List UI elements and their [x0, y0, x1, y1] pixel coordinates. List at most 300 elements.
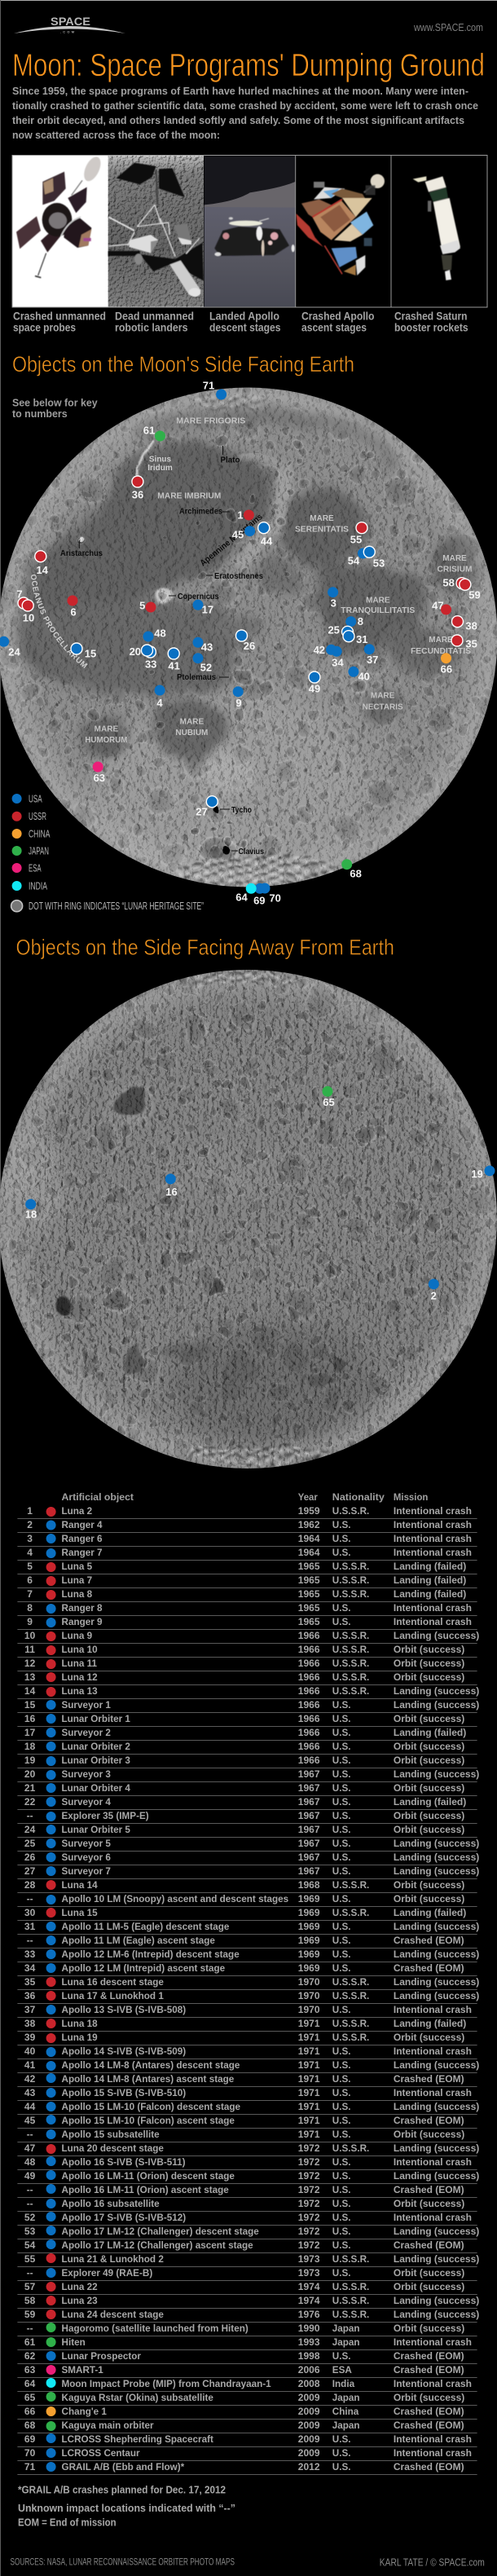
- row 13: Orbit (success): [394, 1671, 464, 1683]
- row 61: [17, 2336, 477, 2350]
- row 13: Luna 12: [62, 1672, 98, 1683]
- row 44: 1971: [298, 2101, 320, 2112]
- row 53: 1972: [298, 2226, 320, 2237]
- row 66: [17, 2406, 477, 2420]
- row 70: Intentional crash: [394, 2447, 472, 2459]
- row 28: 1968: [298, 1879, 320, 1891]
- row 36: U.S.S.R.: [332, 1991, 369, 2001]
- row 51: U.S.: [332, 2199, 351, 2209]
- intro text: now scattered across the face of the moon:: [12, 129, 220, 141]
- marker 65: [323, 1086, 335, 1108]
- row 57: 1974: [298, 2281, 320, 2292]
- marker 54: [348, 548, 368, 567]
- row 34: [17, 1962, 477, 1976]
- marker 19: 19: [471, 1168, 483, 1180]
- legend: USSR: [12, 811, 46, 822]
- row 15: U.S.: [332, 1700, 351, 1711]
- row 24: 1967: [298, 1824, 320, 1835]
- marker 20: [130, 645, 153, 658]
- row 54: 1972: [298, 2239, 320, 2251]
- row 52: Apollo 17 S-IVB (S-IVB-512): [62, 2213, 186, 2223]
- row 60: [17, 2323, 477, 2336]
- row 56: Orbit (success): [394, 2267, 464, 2279]
- row 50: Crashed (EOM): [394, 2184, 464, 2195]
- row 12: [17, 1658, 477, 1671]
- row 31: [17, 1921, 479, 1935]
- marker 49: 49: [309, 683, 320, 695]
- row 41: Apollo 14 LM-8 (Antares) descent stage: [62, 2060, 240, 2071]
- label: Plato: Plato: [220, 455, 240, 465]
- table header: [62, 1491, 428, 1503]
- row 50: U.S.: [332, 2185, 351, 2195]
- marker 43: [192, 637, 213, 654]
- row 68: Japan: [332, 2420, 360, 2431]
- row 65: 2009: [298, 2392, 320, 2403]
- row 65: 65: [24, 2392, 36, 2403]
- row 24: Orbit (success): [394, 1824, 464, 1835]
- row 26: Surveyor 6: [62, 1852, 111, 1863]
- row 43: Intentional crash: [394, 2087, 472, 2098]
- row 60: --: [27, 2323, 33, 2334]
- row 48: Intentional crash: [394, 2156, 472, 2168]
- row 25: 1967: [298, 1838, 320, 1849]
- marker 71: [203, 379, 227, 399]
- marker 6: 6: [70, 606, 77, 618]
- row 64: [17, 2378, 477, 2392]
- logo: SPACE.com: SPACE: [51, 15, 90, 28]
- note: see below for key: to numbers: [12, 407, 68, 420]
- label: Mare Humorum: HUMORUM: [85, 736, 127, 745]
- website url: www.SPACE.com: [413, 22, 483, 33]
- row 1: [17, 1505, 477, 1519]
- row 7: 7: [27, 1588, 33, 1600]
- row 56: --: [27, 2267, 33, 2279]
- label: Sinus Iridum: [147, 455, 173, 473]
- row 46: Orbit (success): [394, 2129, 464, 2140]
- row 24: 24: [24, 1824, 36, 1835]
- row 14: 1966: [298, 1685, 320, 1697]
- marker 33: [144, 646, 156, 671]
- row 14: U.S.S.R.: [332, 1686, 369, 1697]
- row 25: U.S.: [332, 1838, 351, 1849]
- row 33: Apollo 12 LM-6 (Intrepid) descent stage: [62, 1949, 240, 1960]
- row 61: 1993: [298, 2336, 320, 2348]
- row 26: 26: [24, 1852, 36, 1863]
- panel: dead unmanned robotic lander photo: [108, 156, 204, 306]
- row 49: Apollo 16 LM-11 (Orion) descent stage: [62, 2171, 235, 2182]
- row 32: [17, 1935, 477, 1949]
- row 16: Orbit (success): [394, 1713, 464, 1724]
- marker 66: [441, 653, 452, 676]
- row 25: Landing (success): [394, 1838, 479, 1849]
- row 42: Apollo 14 LM-8 (Antares) ascent stage: [62, 2074, 235, 2085]
- legend: [11, 794, 204, 912]
- row 12: Orbit (success): [394, 1658, 464, 1669]
- row 11: 1966: [298, 1644, 320, 1655]
- row 10: Landing (success): [394, 1630, 479, 1641]
- legend: Japan: JAPAN: [29, 846, 49, 857]
- mountain ranges: [140, 442, 285, 561]
- table header: Mission: [394, 1491, 428, 1503]
- row 8: 8: [27, 1602, 33, 1614]
- heading: far side: Objects on the Side Facing Away From Earth: [16, 936, 394, 960]
- row 38: 38: [24, 2018, 36, 2029]
- row 23: [17, 1810, 477, 1824]
- row 64: 2008: [298, 2378, 320, 2389]
- marker 19: [471, 1165, 495, 1180]
- marker 18: 18: [25, 1209, 37, 1221]
- label: Plato: [220, 446, 240, 465]
- row 15: Landing (success): [394, 1699, 479, 1711]
- row 34: U.S.: [332, 1963, 351, 1974]
- row 9: Intentional crash: [394, 1616, 472, 1627]
- marker 35: [451, 635, 477, 650]
- row 42: [17, 2073, 477, 2087]
- row 25: Surveyor 5: [62, 1838, 111, 1849]
- row 19: U.S.: [332, 1755, 351, 1766]
- intro text: tionally crashed to gather scientific data, some crashed by accident, some were left to crash once: [12, 99, 478, 112]
- row 37: U.S.: [332, 2005, 351, 2015]
- marker 58: 58: [442, 577, 455, 589]
- label: Mare Fecunditatis: [411, 636, 471, 656]
- row 14: Luna 13: [62, 1686, 98, 1697]
- row 63: 2006: [298, 2364, 320, 2376]
- row 43: Apollo 15 S-IVB (S-IVB-510): [62, 2088, 186, 2098]
- marker 70: [259, 883, 281, 904]
- note: see below for key: See below for key: [12, 396, 98, 409]
- marker 27: [196, 796, 218, 817]
- row 22: 1967: [298, 1796, 320, 1808]
- row 52: 52: [24, 2212, 36, 2223]
- label: Mare Tranquillitatis: MARE: [366, 597, 390, 605]
- marker 7: 7: [16, 588, 23, 601]
- row 62: Crashed (EOM): [394, 2350, 464, 2362]
- row 54: Crashed (EOM): [394, 2239, 464, 2251]
- marker 59: 59: [468, 589, 481, 601]
- heading: near side: Objects on the Moon's Side Facing Earth: [12, 352, 354, 376]
- marker 69: 69: [253, 895, 266, 907]
- row 60: Hagoromo (satellite launched from Hiten): [62, 2323, 248, 2334]
- row 61: Intentional crash: [394, 2336, 472, 2348]
- marker 41: 41: [168, 659, 180, 672]
- row 28: Luna 14: [62, 1880, 98, 1891]
- row 38: [17, 2018, 477, 2032]
- row 7: Luna 8: [62, 1589, 93, 1600]
- label: Mare Nubium: MARE: [180, 717, 204, 727]
- row 54: 54: [24, 2239, 36, 2251]
- marker 3: [328, 587, 338, 610]
- row 35: Landing (success): [394, 1976, 479, 1988]
- label: Sinus Iridum: Sinus: [149, 455, 172, 465]
- row 59: [17, 2309, 479, 2323]
- row 20: U.S.: [332, 1769, 351, 1780]
- row 60: Japan: [332, 2323, 360, 2334]
- row 13: [17, 1671, 477, 1685]
- row 40: Apollo 14 S-IVB (S-IVB-509): [62, 2046, 186, 2057]
- photo captions: space probes: [13, 321, 76, 334]
- panel: crashed Apollo ascent stage photo: [296, 156, 390, 306]
- row 40: 1971: [298, 2045, 320, 2057]
- moon: near side: [0, 367, 497, 909]
- marker 59: [460, 579, 481, 601]
- legend: India: INDIA: [29, 880, 47, 892]
- row 2: 2: [27, 1519, 33, 1530]
- row 4: 4: [27, 1547, 33, 1558]
- row 69: LCROSS Shepherding Spacecraft: [62, 2434, 213, 2445]
- photo captions: descent stages: [209, 321, 280, 334]
- marker 49: [309, 672, 320, 695]
- row 3: 3: [27, 1533, 33, 1544]
- row 27: Landing (success): [394, 1865, 479, 1877]
- row 20: [17, 1768, 479, 1782]
- row 18: Orbit (success): [394, 1741, 464, 1752]
- row 56: U.S.: [332, 2268, 351, 2279]
- marker 1: 1: [237, 509, 244, 522]
- marker 45: [232, 526, 255, 540]
- row 10: U.S.S.R.: [332, 1631, 369, 1641]
- marker 33: 33: [145, 658, 156, 671]
- row 71: [17, 2461, 477, 2475]
- row 58: Luna 23: [62, 2296, 98, 2306]
- row 42: 42: [24, 2073, 36, 2085]
- row 51: --: [27, 2198, 33, 2209]
- marker 44: [258, 522, 273, 548]
- legend: USSR: USSR: [29, 811, 46, 822]
- row 22: U.S.: [332, 1797, 351, 1808]
- row 10: [17, 1630, 479, 1644]
- row 57: Luna 22: [62, 2282, 98, 2292]
- row 43: [17, 2087, 477, 2101]
- label: Oceanus Procellarum: OCEANUS PROCELLARUM: [31, 574, 88, 668]
- label: Mare Serenitatis: [295, 514, 349, 535]
- row 59: 1976: [298, 2309, 320, 2320]
- row 63: Crashed (EOM): [394, 2364, 464, 2376]
- row 5: 1965: [298, 1561, 320, 1572]
- row 47: [17, 2142, 479, 2156]
- row 66: China: [332, 2406, 359, 2417]
- row 68: [17, 2420, 477, 2433]
- marker 8: 8: [358, 615, 363, 627]
- marker 61: [143, 425, 165, 442]
- photo captions: Dead unmanned: [115, 310, 194, 323]
- footnotes: *GRAIL A/B crashes planned for Dec. 17, 2012: [18, 2484, 226, 2495]
- row 34: 34: [24, 1962, 36, 1974]
- row 18: U.S.: [332, 1742, 351, 1752]
- row 59: Luna 24 descent stage: [62, 2310, 164, 2320]
- row 16: 1966: [298, 1713, 320, 1724]
- marker 10: 10: [23, 612, 34, 624]
- row 4: [17, 1547, 477, 1561]
- row 28: [17, 1879, 477, 1893]
- row 22: 22: [24, 1796, 36, 1808]
- marker 64: 64: [235, 892, 248, 904]
- row 52: [17, 2212, 477, 2226]
- label: Mare Crisium: CRISIUM: [437, 566, 473, 574]
- marker 25: [328, 624, 354, 637]
- row 21: Lunar Orbiter 4: [62, 1783, 130, 1794]
- row 36: [17, 1990, 479, 2004]
- row 30: 1969: [298, 1907, 320, 1918]
- marker 17: 17: [202, 604, 213, 616]
- row 29: U.S.: [332, 1894, 351, 1904]
- row 48: U.S.: [332, 2157, 351, 2168]
- row 12: Luna 11: [62, 1658, 98, 1669]
- marker 9: 9: [235, 697, 242, 709]
- row 34: 1969: [298, 1962, 320, 1974]
- row 57: Orbit (success): [394, 2281, 464, 2292]
- row 3: [17, 1533, 477, 1547]
- row 9: Ranger 9: [62, 1617, 103, 1627]
- row 29: --: [27, 1893, 33, 1904]
- legend: Japan: [12, 846, 49, 857]
- marker 14: 14: [36, 564, 49, 576]
- row 7: U.S.S.R.: [332, 1589, 369, 1600]
- marker 27: 27: [196, 805, 208, 817]
- row 55: U.S.S.R.: [332, 2254, 369, 2265]
- row 6: U.S.S.R.: [332, 1575, 369, 1586]
- row 50: 1972: [298, 2184, 320, 2195]
- row 45: Crashed (EOM): [394, 2115, 464, 2126]
- row 47: 1972: [298, 2142, 320, 2154]
- row 9: U.S.: [332, 1617, 351, 1627]
- marker 16: 16: [165, 1186, 178, 1198]
- photo captions: ascent stages: [301, 321, 367, 334]
- label: Mare Nectaris: NECTARIS: [363, 702, 403, 712]
- row 19: 1966: [298, 1755, 320, 1766]
- marker 48: 48: [154, 627, 166, 639]
- row 13: 13: [24, 1671, 36, 1683]
- row 30: U.S.S.R.: [332, 1908, 369, 1918]
- label: Mare Fecunditatis: FECUNDITATIS: [411, 647, 471, 656]
- row 5: [17, 1561, 477, 1574]
- row 16: 16: [24, 1713, 36, 1724]
- markers: far side: [25, 1086, 495, 1302]
- row 4: 1964: [298, 1547, 320, 1558]
- marker 36: 36: [132, 489, 143, 501]
- label: Mare Nubium: [175, 717, 208, 738]
- row 58: 1974: [298, 2295, 320, 2306]
- row 45: 1971: [298, 2115, 320, 2126]
- row 58: [17, 2295, 479, 2309]
- row 47: U.S.S.R.: [332, 2143, 369, 2154]
- moon labels: near side: [31, 417, 473, 856]
- row 27: U.S.: [332, 1866, 351, 1877]
- row 11: U.S.S.R.: [332, 1645, 369, 1655]
- row 51: Orbit (success): [394, 2198, 464, 2209]
- row 56: Explorer 49 (RAE-B): [62, 2268, 152, 2279]
- label: Mare Nubium: NUBIUM: [175, 729, 208, 738]
- row 68: Crashed (EOM): [394, 2420, 464, 2431]
- row 23: U.S.: [332, 1811, 351, 1821]
- label: Mare Tranquillitatis: TRANQUILLITATIS: [341, 606, 416, 615]
- row 31: 1969: [298, 1921, 320, 1932]
- row 24: [17, 1824, 477, 1838]
- row 5: Landing (failed): [394, 1561, 466, 1572]
- markers: near side: [0, 379, 481, 907]
- row 63: 63: [24, 2364, 36, 2376]
- marker 34: [332, 646, 344, 668]
- marker 26: [236, 630, 255, 652]
- marker 52: [192, 653, 212, 674]
- photo captions: Crashed Apollo: [301, 310, 375, 323]
- row 53: [17, 2226, 479, 2239]
- marker 53: [363, 546, 385, 570]
- table: artificial objects: [17, 1505, 479, 2475]
- legend: USA: USA: [29, 794, 42, 805]
- row 15: Surveyor 1: [62, 1700, 111, 1711]
- marker 31: 31: [356, 633, 368, 645]
- footnotes: Unknown impact locations indicated with “--”: [18, 2503, 235, 2514]
- marker 2: [429, 1279, 439, 1302]
- row 2: U.S.: [332, 1520, 351, 1530]
- maria: [16, 416, 480, 760]
- row 33: U.S.: [332, 1949, 351, 1960]
- row 7: 1965: [298, 1588, 320, 1600]
- row 5: Luna 5: [62, 1561, 93, 1572]
- row 36: Landing (success): [394, 1990, 479, 2001]
- row 37: [17, 2004, 477, 2018]
- marker 34: 34: [332, 656, 344, 668]
- row 4: Intentional crash: [394, 1547, 472, 1558]
- note: see below for key: [12, 396, 98, 420]
- row 41: U.S.: [332, 2060, 351, 2071]
- row 51: 1972: [298, 2198, 320, 2209]
- marker 38: 38: [465, 620, 477, 632]
- label: Mare Fecunditatis: MARE: [429, 636, 453, 645]
- row 62: Lunar Prospector: [62, 2351, 141, 2362]
- row 58: U.S.S.R.: [332, 2296, 369, 2306]
- label: Mare Frigoris: MARE FRIGORIS: [176, 417, 246, 425]
- row 29: 1969: [298, 1893, 320, 1904]
- row 51: [17, 2198, 477, 2212]
- legend: India: [12, 880, 47, 892]
- row 41: 1971: [298, 2059, 320, 2071]
- marker 55: [350, 522, 367, 545]
- row 68: 2009: [298, 2420, 320, 2431]
- row 50: --: [27, 2184, 33, 2195]
- row 30: Landing (failed): [394, 1907, 466, 1918]
- label: Mare Imbrium: MARE IMBRIUM: [157, 492, 221, 500]
- row 23: --: [27, 1810, 33, 1821]
- row 39: 39: [24, 2032, 36, 2043]
- marker 2: 2: [431, 1290, 437, 1302]
- row 38: Luna 18: [62, 2019, 98, 2029]
- row 3: Intentional crash: [394, 1533, 472, 1544]
- row 69: 69: [24, 2433, 36, 2445]
- row 35: 1970: [298, 1976, 320, 1988]
- row 14: [17, 1685, 479, 1699]
- marker 25: 25: [328, 624, 340, 636]
- label: Mare Serenitatis: SERENITATIS: [295, 526, 349, 535]
- row 53: Apollo 17 LM-12 (Challenger) descent stage: [62, 2226, 259, 2237]
- far side dark craters: [53, 1079, 347, 1404]
- sparse mare craters: [75, 435, 374, 862]
- row 66: Chang'e 1: [62, 2406, 107, 2417]
- row 2: 1962: [298, 1519, 320, 1530]
- row 46: 1971: [298, 2129, 320, 2140]
- row 31: 31: [24, 1921, 36, 1932]
- row 59: Landing (success): [394, 2309, 479, 2320]
- marker 66: 66: [441, 663, 452, 676]
- label: Tycho: [220, 805, 252, 815]
- panel: crashed unmanned space probe photo: [12, 154, 108, 307]
- label: Aristarchus: Aristarchus: [60, 548, 103, 558]
- row 1: Intentional crash: [394, 1505, 472, 1517]
- marker 16: [165, 1174, 178, 1198]
- row 65: Orbit (success): [394, 2392, 464, 2403]
- row 57: 57: [24, 2281, 36, 2292]
- row 5: 5: [27, 1561, 33, 1572]
